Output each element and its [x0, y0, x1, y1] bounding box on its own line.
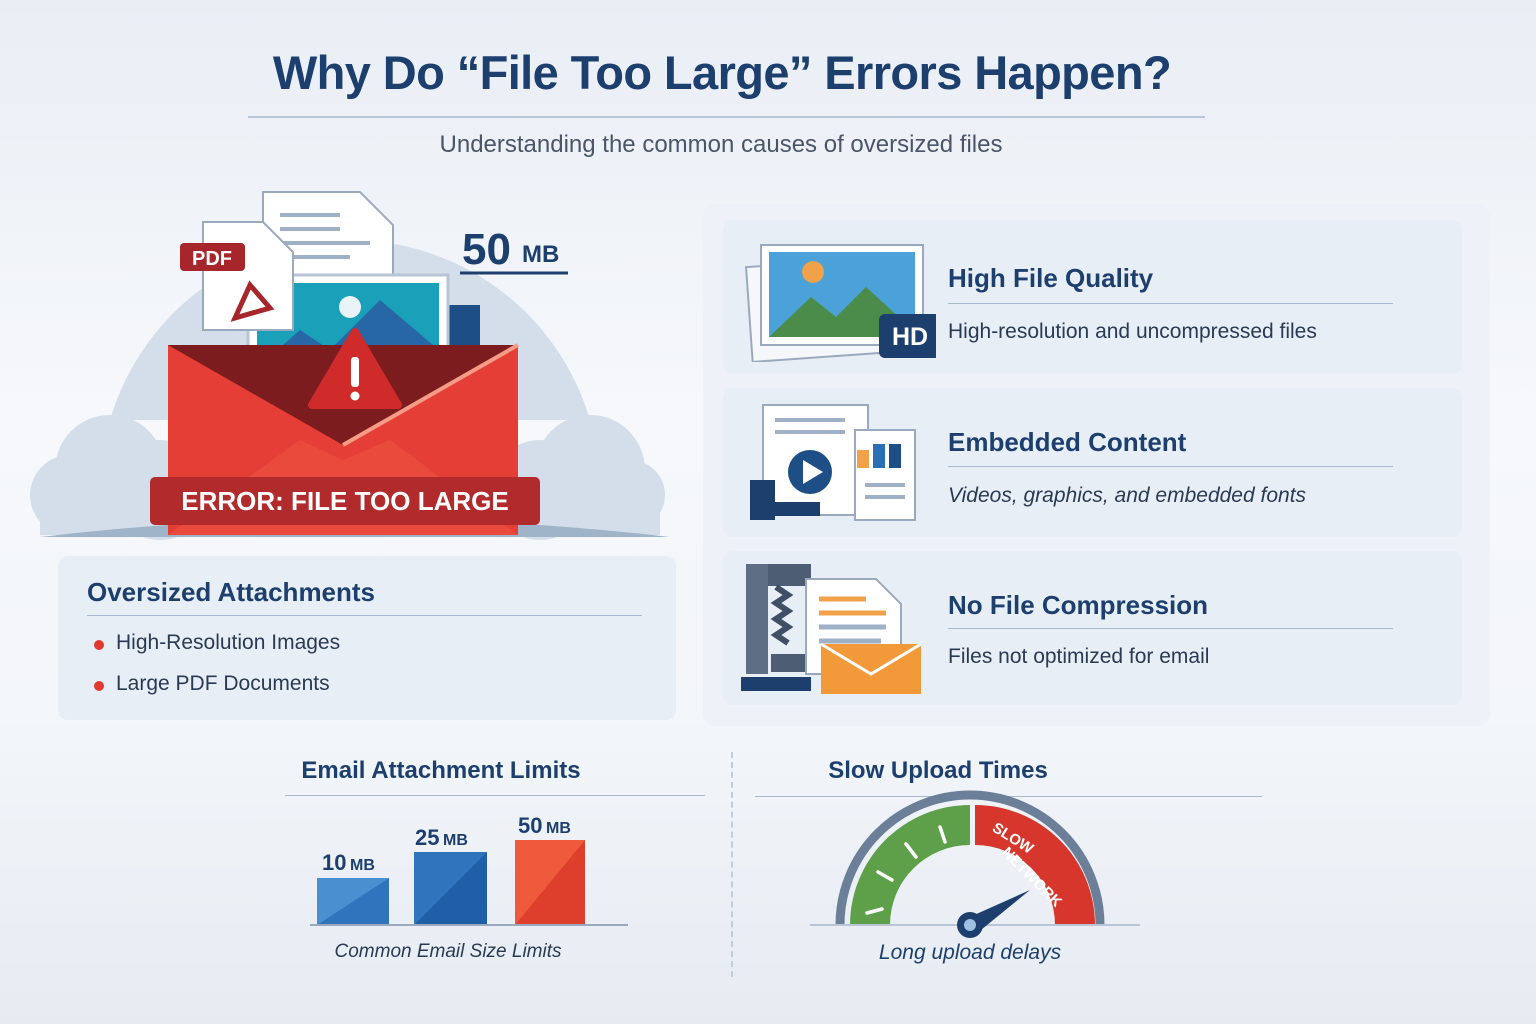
card: embedded content: Videos, graphics, and embedded fonts	[948, 484, 1306, 507]
illustration: email error: MB	[522, 241, 559, 268]
bar chart: MB	[443, 832, 468, 849]
text: Common Email Size Limits	[334, 941, 562, 962]
panel: oversized attachments: High-Resolution Images	[116, 631, 340, 654]
illustration: email error	[30, 191, 670, 540]
envelope	[168, 345, 518, 535]
text: Long upload delays	[879, 941, 1061, 964]
card: no file compression	[723, 551, 1462, 705]
subtitle: Understanding the common causes of oversized files	[440, 131, 1002, 158]
doc	[263, 192, 393, 300]
warning	[312, 332, 398, 405]
cloud backdrop	[30, 240, 665, 540]
bar chart: MB	[350, 857, 375, 874]
card: high file quality: High File Quality	[948, 263, 1153, 293]
bar chart: MB	[546, 820, 571, 837]
title: Why Do “File Too Large” Errors Happen?	[273, 46, 1171, 99]
card: high file quality	[723, 220, 1462, 374]
bar chart	[310, 813, 628, 926]
panel: oversized attachments	[58, 556, 676, 720]
pdf: PDF	[192, 248, 232, 270]
bar chart: 10	[322, 850, 346, 875]
50MB: 50	[462, 225, 511, 274]
panel: causes container	[703, 204, 1490, 726]
error banner	[150, 477, 540, 525]
card: no file compression: No File Compression	[948, 590, 1208, 620]
pdf	[180, 222, 293, 330]
image	[440, 305, 480, 425]
gauge: SLOW	[989, 819, 1037, 858]
gauge	[810, 790, 1140, 938]
error banner: ERROR: FILE TOO LARGE	[181, 486, 509, 516]
panel: oversized attachments: Large PDF Documents	[116, 672, 330, 695]
bar chart: 50	[518, 813, 542, 838]
panel: oversized attachments: Oversized Attachments	[87, 577, 375, 607]
card: embedded content	[723, 388, 1462, 537]
gauge: NETWORK	[998, 844, 1065, 911]
card: embedded content: Embedded Content	[948, 427, 1186, 457]
card: high file quality: HD	[892, 323, 928, 351]
card: high file quality: High-resolution and uncompressed files	[948, 320, 1317, 343]
heading: slow upload times: Slow Upload Times	[828, 757, 1048, 784]
bar chart: 25	[415, 825, 439, 850]
heading: email attachment limits: Email Attachment Limits	[301, 757, 581, 784]
card: no file compression: Files not optimized for email	[948, 645, 1209, 668]
